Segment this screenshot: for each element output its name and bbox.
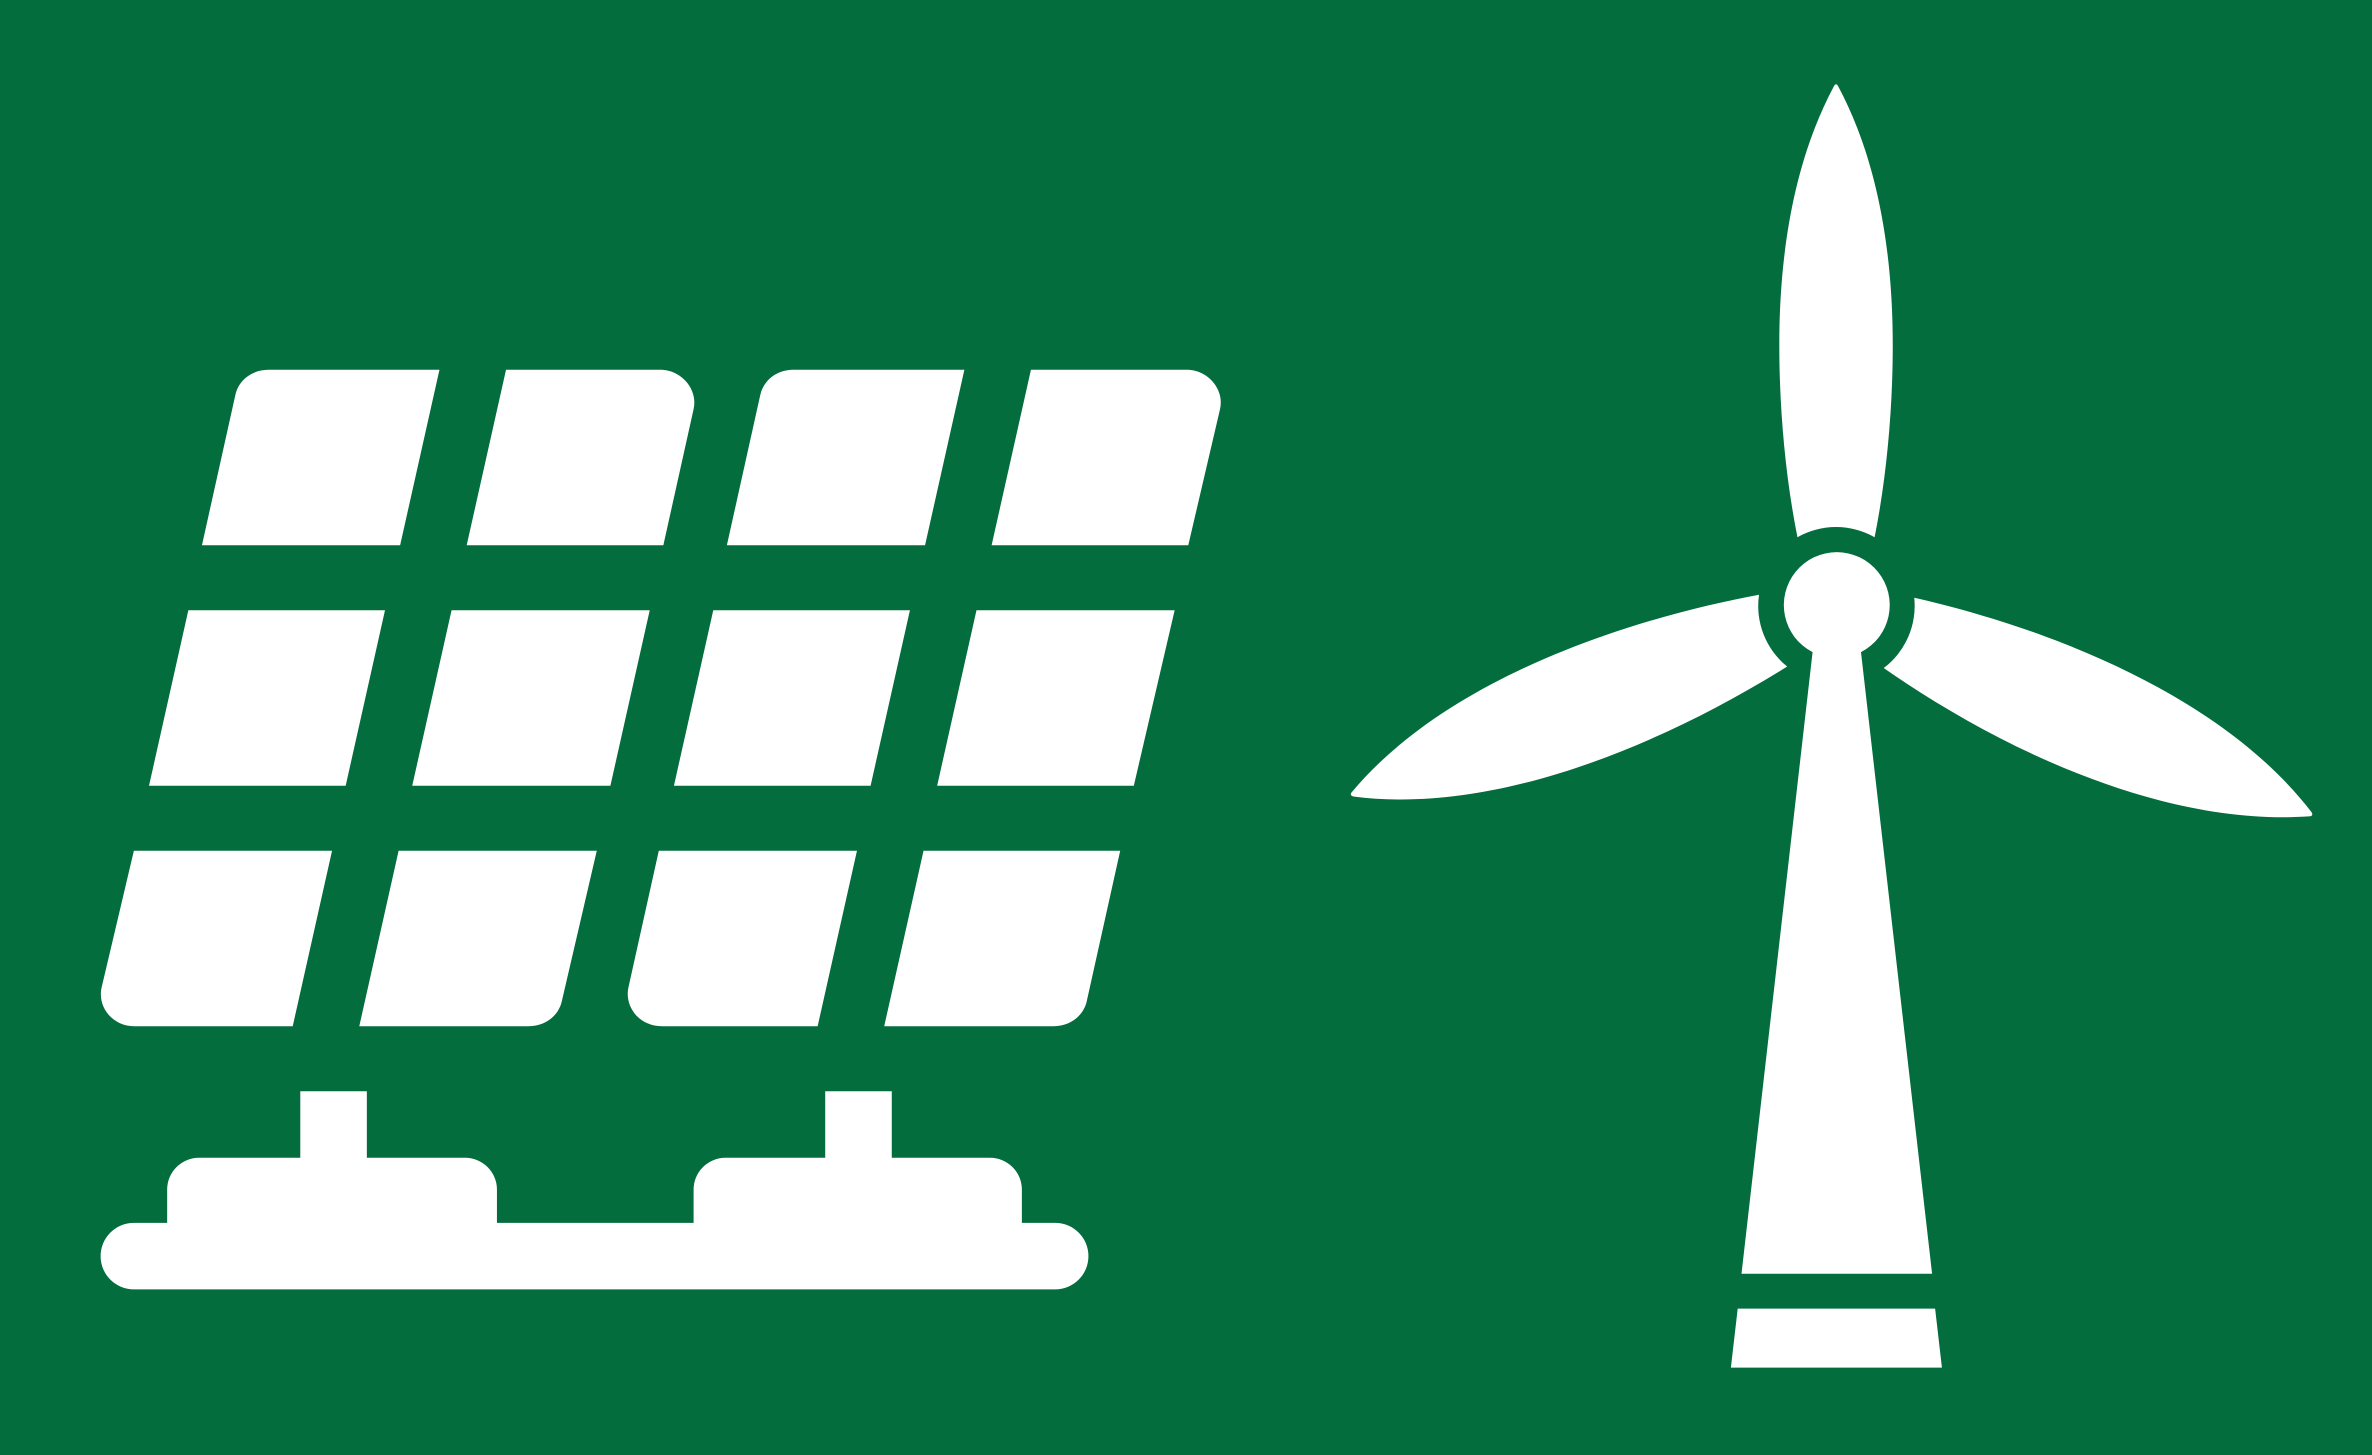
turbine base	[1731, 1309, 1942, 1368]
panel cell row 2 column 4	[937, 610, 1175, 786]
panel cell row 2 column 3	[674, 610, 910, 786]
panel cell row 1 column 3	[727, 370, 964, 545]
panel base	[101, 1091, 1088, 1289]
turbine blade left	[1351, 595, 1787, 800]
icon: solar panel	[101, 370, 1221, 1289]
panel cell row 3 column 4	[884, 851, 1120, 1026]
panel cell row 3 column 3	[628, 851, 857, 1026]
panel cell row 1 column 1	[202, 370, 439, 545]
panel cell row 3 column 1	[101, 851, 332, 1026]
turbine hub and tower	[1741, 552, 1932, 1274]
panel cell row 3 column 2	[359, 851, 597, 1026]
panel cell row 1 column 4	[992, 370, 1221, 545]
turbine blade top	[1779, 84, 1893, 537]
panel cell row 2 column 2	[412, 610, 650, 786]
turbine blade right	[1884, 598, 2312, 817]
panel cell row 2 column 1	[149, 610, 385, 786]
icon: wind turbine	[1351, 84, 2312, 1368]
panel cell row 1 column 2	[467, 370, 694, 545]
